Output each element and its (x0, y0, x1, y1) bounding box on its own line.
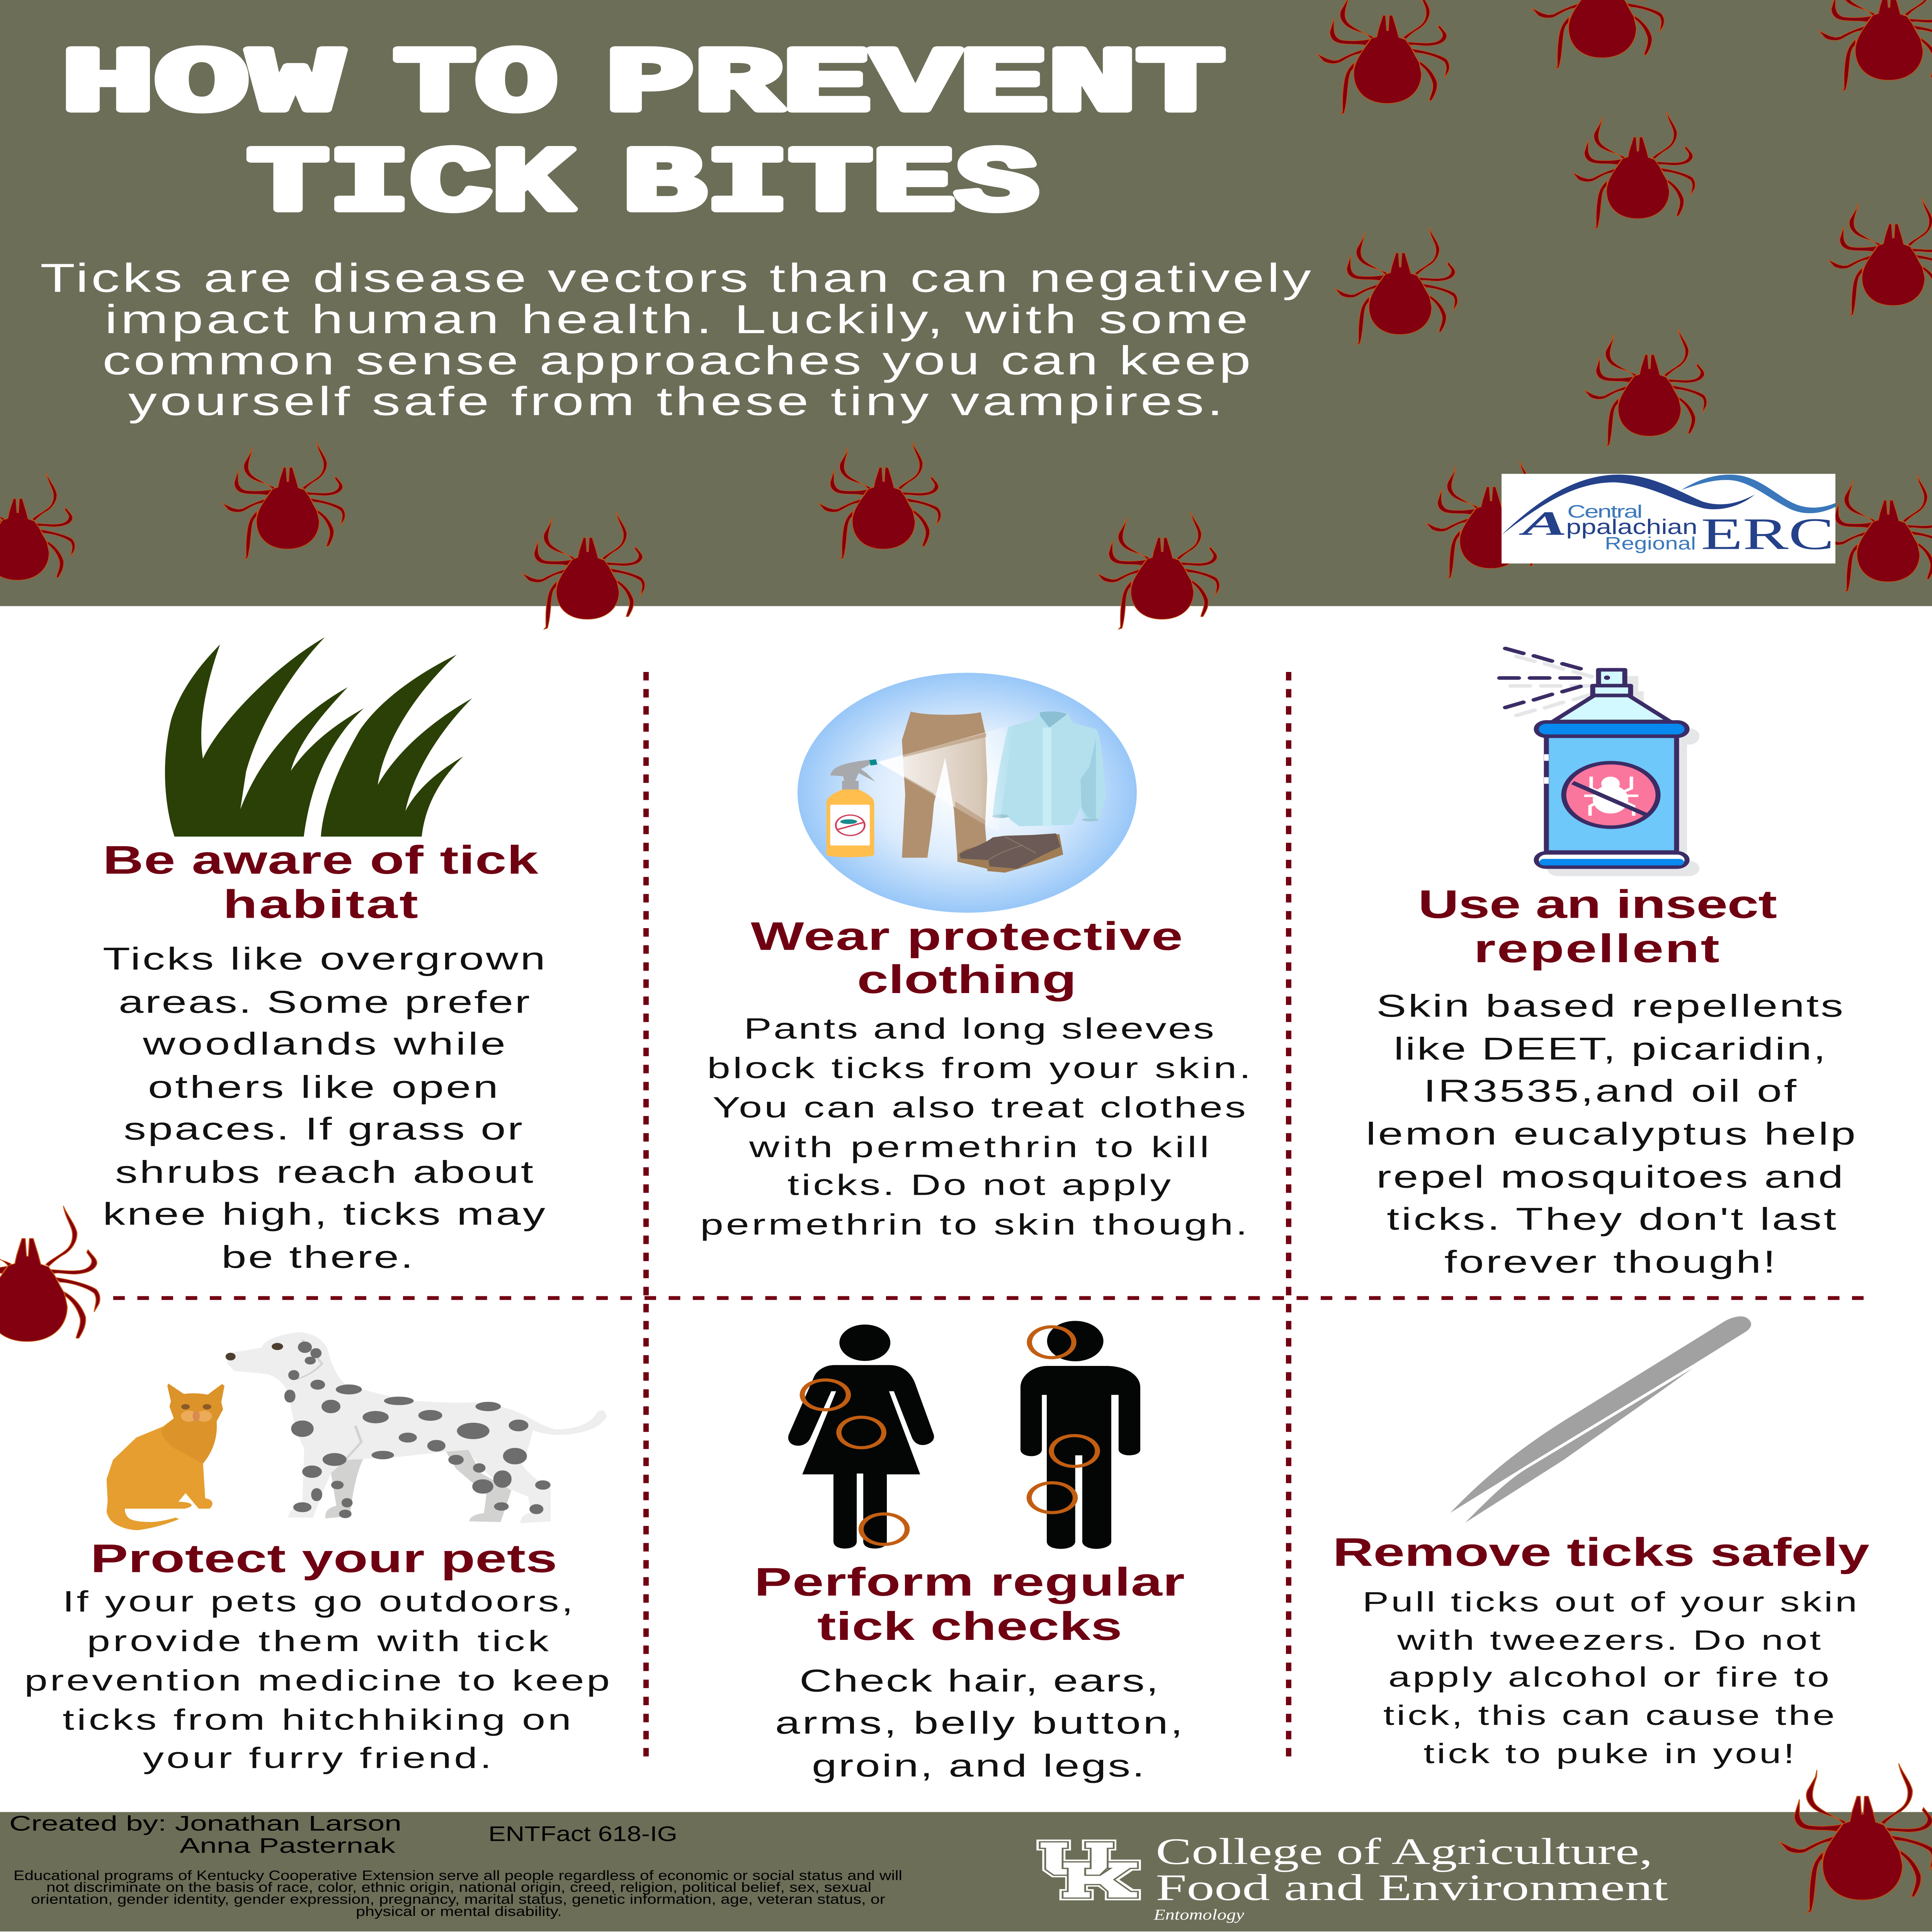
body text: IR3535,and oil of (1423, 1073, 1797, 1109)
logo: Central Appalachian Regional ERC: Regional (1605, 534, 1696, 554)
intro text: Ticks are disease vectors than can negatively (40, 255, 1311, 301)
title: PREVENT (605, 34, 1225, 137)
college name: Entomology (1153, 1906, 1244, 1923)
publication number: ENTFact 618-IG (488, 1822, 677, 1846)
heading: repellent (1474, 926, 1719, 971)
body text: woodlands while (143, 1026, 505, 1061)
body text: ticks from hitchhiking on (63, 1703, 571, 1736)
body text: permethrin to skin though. (700, 1208, 1247, 1241)
logo: Central Appalachian Regional ERC: Central (1567, 502, 1643, 522)
title: HOW (61, 34, 344, 137)
footer band (0, 1812, 1932, 1932)
heading (103, 838, 539, 927)
icon: cat and dog (107, 1332, 607, 1530)
college name (1153, 1830, 1668, 1923)
heading: Be aware of tick (103, 838, 539, 882)
body text: You can also treat clothes (713, 1090, 1246, 1124)
body text: Skin based repellents (1376, 988, 1843, 1024)
title (61, 34, 1225, 236)
body text: areas. Some prefer (119, 984, 530, 1020)
body text: ticks. They don't last (1387, 1201, 1836, 1236)
body text (103, 941, 546, 1275)
body text: repel mosquitoes and (1376, 1159, 1843, 1195)
icon: tweezers (1450, 1316, 1751, 1523)
body text: your furry friend. (143, 1741, 492, 1774)
credits: Anna Pasternak (180, 1834, 395, 1857)
logo: UK block letters (1036, 1840, 1141, 1900)
heading (1418, 882, 1777, 971)
body text: lemon eucalyptus help (1366, 1116, 1855, 1151)
body text: spaces. If grass or (124, 1111, 522, 1146)
college name: College of Agriculture, (1156, 1830, 1653, 1872)
body text: prevention medicine to keep (24, 1663, 610, 1697)
panel: perform regular tick checks (754, 1321, 1185, 1784)
panel: be aware of tick habitat (103, 637, 546, 1275)
tick pattern (0, 0, 1932, 629)
logo: Central Appalachian Regional ERC: A (1519, 505, 1567, 543)
title: BITES (622, 134, 1039, 236)
body text: shrubs reach about (115, 1154, 533, 1190)
heading: tick checks (817, 1604, 1122, 1648)
heading: Perform regular (754, 1560, 1185, 1604)
icon: clothing treated with spray (798, 673, 1137, 913)
body text: Ticks like overgrown (103, 941, 545, 976)
body text: with permethrin to kill (749, 1130, 1209, 1163)
body text: like DEET, picaridin, (1394, 1031, 1826, 1066)
legal statement: orientation, gender identity, gender expression, pregnancy, marital status, genetic information, age, veteran status, or (31, 1892, 885, 1907)
body text: tick, this can cause the (1383, 1700, 1835, 1731)
icon: grass (165, 637, 472, 837)
body text: apply alcohol or fire to (1388, 1662, 1829, 1692)
panel: protect your pets (24, 1332, 610, 1774)
intro text: yourself safe from these tiny vampires. (128, 379, 1223, 424)
body text: with tweezers. Do not (1397, 1624, 1821, 1656)
panel: wear protective clothing (700, 673, 1251, 1241)
body text: forever though! (1444, 1244, 1776, 1279)
panel: use an insect repellent (1366, 648, 1855, 1279)
title: TICK (247, 134, 574, 236)
tick: footer (1779, 1764, 1932, 1913)
body text (700, 1012, 1251, 1241)
legal statement: physical or mental disability. (356, 1904, 562, 1919)
body text (1362, 1586, 1857, 1769)
body text: knee high, ticks may (103, 1196, 546, 1232)
credits: Created by: Jonathan Larson (9, 1812, 401, 1835)
logo: Central Appalachian Regional ERC: ppalachian (1566, 515, 1697, 539)
title: TO (394, 34, 557, 137)
legal statement: not discriminate on the basis of race, color, ethnic origin, national origin, creed, religion, political belief, sex, sexual (46, 1880, 871, 1895)
body text: Pull ticks out of your skin (1362, 1586, 1857, 1617)
intro text: impact human health. Luckily, with some (105, 297, 1248, 342)
body text: Check hair, ears, (799, 1663, 1158, 1699)
body text: groin, and legs. (812, 1748, 1145, 1784)
heading: Protect your pets (90, 1536, 557, 1581)
body text: provide them with tick (87, 1624, 549, 1657)
body text (24, 1585, 610, 1774)
logo: Central Appalachian Regional ERC: ERC (1701, 509, 1834, 559)
body text: Pants and long sleeves (744, 1012, 1214, 1045)
heading: Use an insect (1418, 882, 1777, 927)
body text: block ticks from your skin. (707, 1051, 1251, 1084)
tick: left margin (0, 1206, 100, 1354)
icon: body figures with check circles (788, 1321, 1140, 1549)
logo: Central Appalachian Regional ERC (1502, 474, 1835, 563)
body text (1366, 988, 1855, 1279)
body text: tick to puke in you! (1423, 1738, 1794, 1769)
intro text: common sense approaches you can keep (102, 338, 1251, 383)
heading: habitat (223, 882, 418, 927)
intro text (40, 255, 1311, 424)
body text: ticks. Do not apply (787, 1168, 1171, 1201)
heading: clothing (857, 957, 1077, 1002)
heading: Wear protective (751, 914, 1183, 958)
body text: arms, belly button, (775, 1705, 1183, 1741)
heading (751, 914, 1183, 1002)
header band (0, 0, 1932, 606)
legal statement: Educational programs of Kentucky Cooperative Extension serve all people regardless of economic or social status and will (14, 1868, 902, 1883)
body text: others like open (148, 1069, 498, 1105)
heading: Remove ticks safely (1333, 1530, 1869, 1574)
heading (754, 1560, 1185, 1648)
panel: remove ticks safely (1333, 1316, 1869, 1769)
body text: be there. (221, 1239, 413, 1275)
body text (775, 1663, 1183, 1784)
icon: repellent spray can (1500, 648, 1699, 876)
legal statement (14, 1868, 902, 1919)
college name: Food and Environment (1156, 1867, 1668, 1908)
credits (9, 1812, 401, 1857)
body text: If your pets go outdoors, (63, 1585, 573, 1618)
